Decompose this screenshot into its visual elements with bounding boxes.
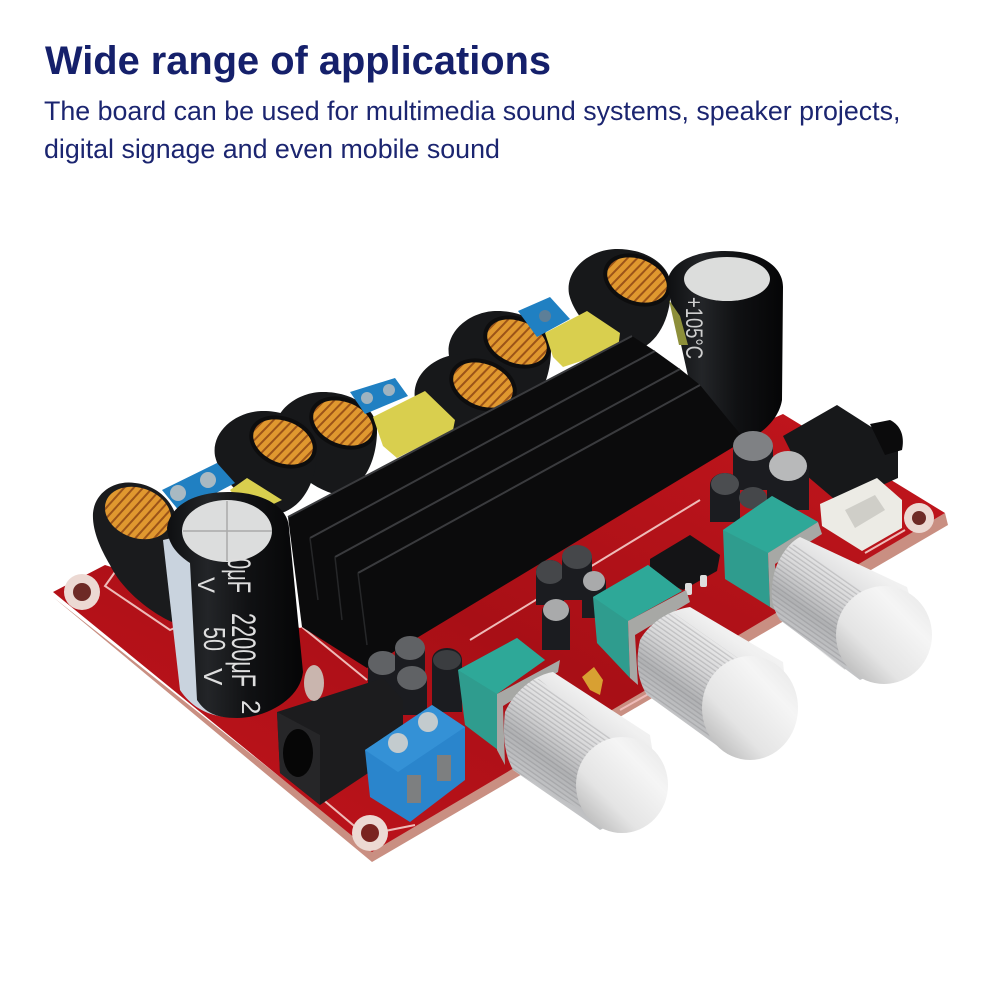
blue screw terminal [365, 705, 465, 822]
power jack and LED [277, 665, 403, 805]
knob right [772, 537, 932, 684]
knob middle [638, 607, 798, 760]
knob left [504, 672, 668, 833]
audio jack and connector [783, 405, 903, 551]
capacitor 2200uF 50V: 2 [236, 700, 266, 714]
capacitor 2200uF 50V: V [198, 668, 228, 686]
terminals and yellow film capacitors [162, 297, 620, 515]
description text: The board can be used for multimedia sound systems, speaker projects, [44, 96, 900, 126]
inductors back row [215, 244, 679, 514]
potentiometers [458, 496, 822, 765]
front-left inductor [93, 478, 179, 622]
circuit board [53, 414, 948, 862]
capacitor 2200uF 50V: 2200μF [224, 613, 262, 687]
capacitor back right: +105°C [680, 297, 707, 359]
title: Wide range of applications [45, 39, 551, 83]
capacitor 2200uF 50V: 50 [197, 627, 232, 651]
capacitor 2200uF 50V: 0μF [221, 558, 257, 593]
description text [44, 96, 900, 164]
small electrolytic capacitors [368, 431, 809, 715]
capacitor 2200uF 50V: V [192, 577, 219, 593]
capacitor back right [667, 251, 783, 445]
heat sink [288, 336, 745, 668]
capacitor 2200uF 50V [163, 492, 303, 718]
chip [650, 535, 720, 595]
description text: digital signage and even mobile sound [44, 134, 500, 164]
